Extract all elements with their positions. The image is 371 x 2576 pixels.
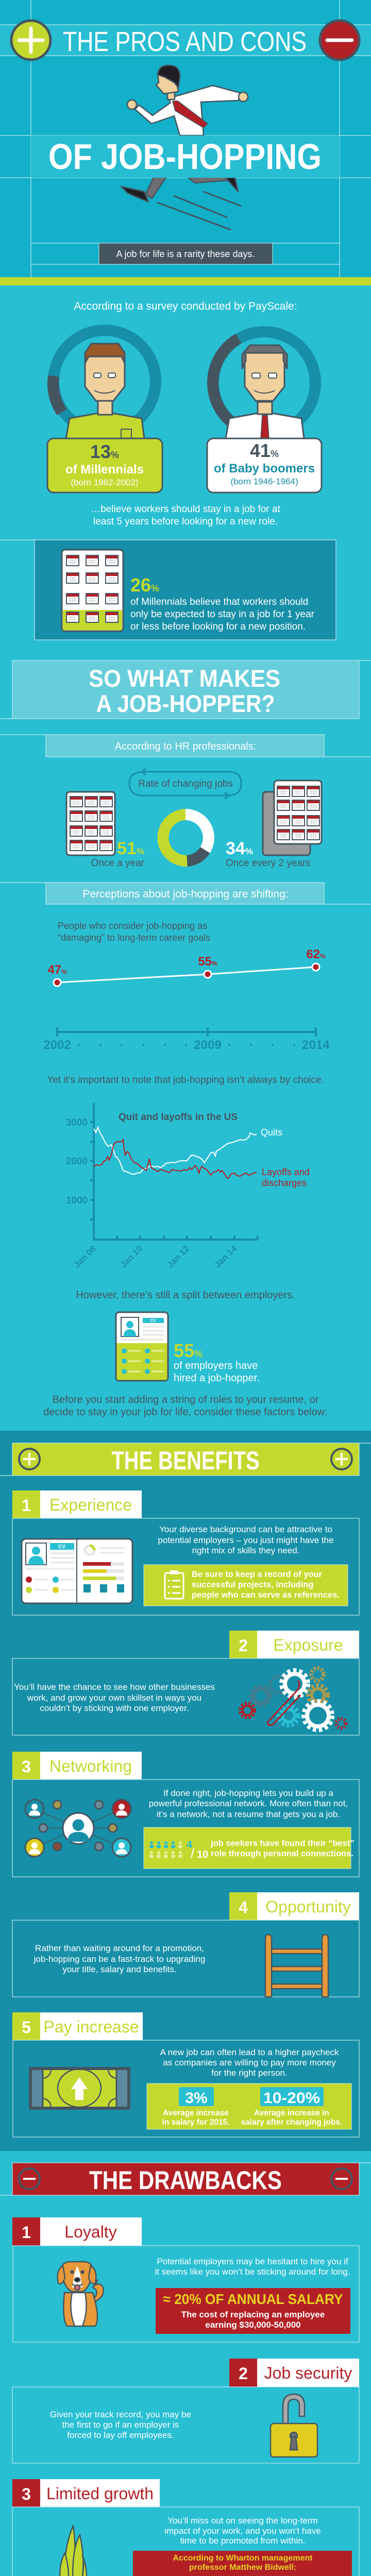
callout: 20% of annual salary: ≈ 20% OF ANNUAL SALARY — [163, 2291, 343, 2307]
benefit 1: experience: potential employers – you just might have the — [158, 1535, 334, 1545]
drawback 3: limited growth: 3 — [22, 2485, 31, 2503]
panel: millennial stat: (born 1982-2002) — [71, 478, 139, 487]
benefit 4: opportunity: Rather than waiting around for a promotion, — [35, 1943, 204, 1953]
callout: keep a record: Be sure to keep a record of your — [192, 1570, 323, 1579]
drawback 3: limited growth: You’ll miss out on seeing the long-term — [167, 2516, 318, 2526]
benefit 1: experience: 1 — [22, 1496, 31, 1515]
subheading: according to HR — [0, 735, 371, 757]
callout: keep a record — [144, 1565, 348, 1606]
panel: millennial stat — [47, 330, 162, 493]
benefit 3: networking — [12, 1752, 359, 1877]
drawback 3: limited growth: impact of your work, and you won’t have — [164, 2526, 321, 2536]
chart: damaging perception line — [43, 921, 330, 1052]
heading: the benefits — [0, 1443, 371, 1476]
benefit 3: networking: 3 — [22, 1757, 31, 1776]
text: believe workers should stay — [91, 504, 280, 527]
drawback 3: limited growth — [12, 2479, 359, 2576]
chart: damaging perception line: 62% — [306, 947, 326, 961]
callout: salary increases: 3% — [185, 2090, 208, 2107]
chart: rate of changing jobs: Once every 2 years — [226, 858, 311, 869]
drawback 2: job security: the first to go if an employer is — [62, 2420, 179, 2430]
benefit 4: opportunity: 4 — [239, 1898, 248, 1917]
drawback 1: loyalty: 1 — [22, 2223, 31, 2242]
icon: plus circle — [11, 21, 50, 60]
header background — [0, 0, 371, 277]
donut — [163, 815, 209, 861]
drawback 2: job security: forced to lay off employees. — [67, 2430, 174, 2440]
benefit 5: pay increase: A new job can often lead to a higher paycheck — [160, 2047, 339, 2057]
benefit 1: experience: right mix of skills they need. — [192, 1546, 299, 1555]
chart: quits and layoffs: Jan 12 — [165, 1244, 191, 1270]
heading: the drawbacks: THE DRAWBACKS — [89, 2166, 282, 2195]
benefit 5: pay increase: 5 — [22, 2018, 31, 2037]
drawback 1: loyalty — [12, 2217, 359, 2342]
benefit 5: pay increase: Pay increase — [44, 2018, 139, 2036]
benefit 1: experience: Your diverse background can be attractive to — [159, 1524, 332, 1534]
panel: millennial stat: 13% — [90, 441, 119, 462]
icon: cv 55%: CV — [150, 1318, 156, 1323]
callout: 4/10 job seekers: / — [191, 1845, 195, 1861]
benefit 1: experience — [12, 1490, 359, 1615]
benefit 4: opportunity: your title, salary and benefits. — [62, 1964, 177, 1974]
icon: calendar left — [66, 792, 115, 855]
drawback 2: job security: 2 — [239, 2364, 248, 2383]
text: consider factors — [43, 1394, 328, 1418]
panel: baby boomer stat: 41% — [250, 440, 279, 461]
callout: wharton research: professor Matthew Bidwell: — [189, 2563, 296, 2572]
stat: 55% employers — [174, 1340, 260, 1384]
chart: quits and layoffs: discharges — [262, 1178, 307, 1188]
chart: rate of changing jobs: 51% — [117, 839, 144, 858]
chart: quits and layoffs: Quit and layoffs in the US — [119, 1112, 238, 1123]
stat: 55% employers: of employers have — [174, 1360, 258, 1371]
subtitle box — [99, 243, 273, 264]
heading: so what makes a job-hopper — [0, 660, 371, 719]
text: believe workers should stay: least 5 years before looking for a new role. — [93, 516, 278, 527]
section: drawbacks background — [0, 2151, 371, 2576]
title line 2 band: OF JOB-HOPPING — [48, 137, 322, 177]
text: consider factors: Before you start adding a string of roles to your resume, or — [53, 1394, 319, 1405]
panel: 26% of millennials: only be expected to stay in a job for 1 year — [130, 609, 315, 620]
title line 1: THE PROS AND CONS — [63, 26, 307, 57]
benefit 2: exposure: couldn’t by sticking with one employer. — [40, 1703, 189, 1713]
subheading: perceptions shifting — [0, 883, 371, 904]
benefit 1: experience: Experience — [49, 1496, 132, 1514]
callout: 20% of annual salary: The cost of replacing an employee — [181, 2310, 325, 2319]
chart: rate of changing jobs: Rate of changing jobs — [138, 778, 233, 789]
chart: damaging perception line: People who consider job-hopping as — [58, 921, 207, 931]
callout: 4/10 job seekers: 10 — [197, 1849, 208, 1860]
drawback 2: job security — [12, 2359, 359, 2463]
chart: rate of changing jobs: Once a year — [91, 858, 145, 869]
stat: 55% employers: 55% — [174, 1340, 203, 1361]
drawback 3: limited growth: time to be promoted from within. — [180, 2536, 305, 2546]
panel: 26% of millennials: 26% — [130, 574, 159, 596]
chart: quits and layoffs: Jan 14 — [212, 1244, 239, 1270]
callout: wharton research — [132, 2551, 352, 2576]
text: believe workers should stay: …believe workers should stay in a job for at — [91, 504, 280, 515]
icon: ladder — [265, 1935, 328, 1997]
benefit 2: exposure — [12, 1631, 359, 1735]
subheading: according to HR: According to HR professionals: — [115, 741, 256, 752]
benefit 2: exposure: work, and grow your own skillset in ways you — [27, 1693, 201, 1703]
callout: keep a record: people who can serve as references. — [192, 1590, 340, 1600]
panel: millennial stat: of Millennials — [65, 463, 144, 477]
icon: calendar — [62, 550, 123, 631]
panel: 26% of millennials: or less before looking for a new position. — [130, 621, 306, 632]
drawback 2: job security: Given your track record, you may be — [50, 2410, 191, 2419]
stat: 55% employers: hired a job-hopper. — [174, 1372, 260, 1384]
benefit 2: exposure: 2 — [239, 1636, 248, 1655]
chart: rate of changing jobs: 34% — [226, 839, 253, 858]
heading: so what makes a job-hopper: SO WHAT MAKES — [89, 665, 280, 692]
callout: salary increases — [147, 2083, 351, 2129]
callout: 4/10 job seekers: 4 — [187, 1839, 193, 1851]
benefit 2: exposure: You’ll have the chance to see how other businesses — [14, 1682, 215, 1692]
chart: quits and layoffs: Jan 08 — [72, 1244, 98, 1270]
callout: 4/10 job seekers — [144, 1827, 355, 1869]
callout: salary increases: salary after changing jobs. — [241, 2118, 342, 2127]
icon: dog — [58, 2262, 104, 2326]
illustration: running man — [121, 65, 248, 230]
benefit 2: exposure: Exposure — [273, 1636, 343, 1654]
drawback 2: job security: Job security — [264, 2364, 352, 2382]
drawback 1: loyalty: it seems like you won’t be sticking around for long. — [155, 2267, 350, 2277]
chart: quits and layoffs: Jan 10 — [118, 1244, 144, 1270]
callout: salary increases: 10-20% — [263, 2090, 320, 2107]
text: split between employers: However, there’s still a split between employers. — [76, 1290, 295, 1301]
icon: minus circle — [320, 21, 359, 60]
panel: 26% of millennials: of Millennials believe that workers should — [130, 597, 308, 607]
chart: rate of changing jobs — [66, 769, 322, 869]
chart: quits and layoffs: Quits — [261, 1127, 282, 1138]
chart: damaging perception line: “damaging” to long-term career goals — [58, 933, 210, 943]
chart: quits and layoffs: 2000 — [66, 1156, 88, 1167]
illustration: network — [25, 1800, 131, 1857]
panel: baby boomer stat: of Baby boomers — [214, 462, 315, 476]
panel: 26% of millennials — [0, 540, 336, 640]
benefit 5: pay increase: for the right person. — [211, 2068, 288, 2078]
section: benefits background — [0, 1431, 371, 2151]
illustration: cv dashboard — [22, 1539, 132, 1603]
benefit 4: opportunity: Opportunity — [265, 1897, 351, 1916]
benefit 3: networking: If done right, job-hopping lets you build up a — [163, 1788, 333, 1798]
icon: potted plant — [50, 2526, 97, 2576]
drawback 3: limited growth: Limited growth — [46, 2484, 154, 2503]
benefit 5: pay increase: as companies are willing to pay more money — [163, 2058, 336, 2067]
benefit 4: opportunity — [12, 1892, 359, 1997]
chart: quits and layoffs: Layoffs and — [262, 1167, 310, 1177]
benefit 5: pay increase — [12, 2012, 359, 2137]
heading: so what makes a job-hopper: A JOB-HOPPER? — [96, 690, 275, 717]
benefit 3: networking: it’s a network, not a resume that gets you a job. — [157, 1809, 340, 1819]
chart: quits and layoffs: 3000 — [66, 1117, 88, 1128]
heading: the drawbacks — [0, 2163, 371, 2195]
drawback 1: loyalty: Loyalty — [64, 2223, 117, 2241]
icon: calendar stack right — [263, 781, 322, 855]
chart: damaging perception line: 2014 — [302, 1038, 330, 1052]
illustration: gears — [241, 1668, 346, 1729]
illustration: cv dashboard: CV — [58, 1544, 65, 1550]
subtitle box: A job for life is a rarity these days. — [116, 249, 255, 259]
callout: 4/10 job seekers: job seekers have found their “best” — [210, 1839, 355, 1848]
benefit 3: networking: Networking — [49, 1757, 132, 1775]
callout: salary increases: Average increase in — [254, 2109, 329, 2117]
section: survey background — [0, 285, 371, 1431]
icon: cv 55% — [116, 1312, 168, 1381]
callout: wharton research: According to Wharton management — [173, 2554, 313, 2563]
drawback 1: loyalty: Potential employers may be hesitant to hire you if — [157, 2257, 348, 2266]
benefit 4: opportunity: job-hopping can be a fast-track to upgrading — [33, 1954, 205, 1964]
panel: baby boomer stat: (born 1946-1964) — [230, 477, 298, 486]
chart: damaging perception line: 2009 — [194, 1038, 222, 1052]
callout: keep a record: successful projects, including — [192, 1580, 314, 1589]
text: not always by choice: Yet it’s important to note that job-hopping isn’t always by choice. — [47, 1075, 324, 1086]
callout: salary increases: in salary for 2015. — [162, 2118, 229, 2127]
callout: 20% of annual salary: earning $30,000-50,000 — [205, 2320, 301, 2330]
panel: baby boomer stat — [207, 332, 322, 493]
icon: banknote up arrow — [29, 2067, 130, 2110]
heading: the benefits: THE BENEFITS — [111, 1446, 260, 1475]
green stripe — [0, 277, 371, 285]
icon: unlocked padlock — [271, 2394, 317, 2457]
callout: salary increases: Average increase — [163, 2109, 229, 2117]
chart: damaging perception line: 2002 — [43, 1038, 71, 1052]
benefit 3: networking: powerful professional network. More often than not, — [149, 1799, 348, 1808]
callout: 20% of annual salary — [156, 2288, 350, 2334]
text: consider factors: decide to stay in your job for life, consider these factors below: — [43, 1406, 328, 1418]
text: survey intro: According to a survey conducted by PayScale: — [74, 300, 297, 312]
chart: quits and layoffs — [66, 1103, 310, 1270]
chart: damaging perception line: 55% — [198, 955, 217, 969]
chart: quits and layoffs: 1000 — [66, 1195, 88, 1206]
callout: 4/10 job seekers: role through personal connections. — [211, 1849, 353, 1858]
chart: damaging perception line: 47% — [47, 963, 67, 977]
subheading: perceptions shifting: Perceptions about job-hopping are shifting: — [82, 888, 289, 900]
